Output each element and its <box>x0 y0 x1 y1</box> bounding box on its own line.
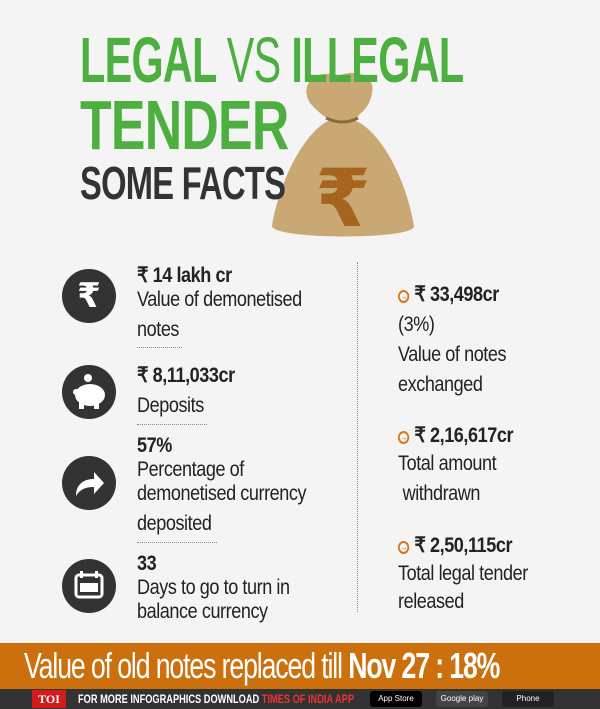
icon: calendar <box>62 559 116 613</box>
text: 57% <box>137 434 306 535</box>
title line 3: SOME FACTS <box>80 157 285 209</box>
icon: arrow <box>62 456 116 510</box>
text: released <box>398 534 528 613</box>
text: exchanged: (3%) <box>398 313 434 336</box>
text: 33 days: balance currency <box>137 600 268 623</box>
banner: Value of old notes replaced till Nov 27 : 18% <box>24 645 499 686</box>
text: exchanged <box>398 283 506 396</box>
text: withdrawn: withdrawn <box>403 482 480 505</box>
footer: TOI <box>38 692 60 706</box>
text: 14 lakh cr <box>137 264 302 341</box>
text: released: ₹ 2,50,115cr <box>414 534 512 557</box>
text: 57%: Percentage of <box>137 458 244 481</box>
icon: piggy bank <box>62 365 116 419</box>
footer <box>0 689 600 709</box>
text: withdrawn <box>398 424 514 505</box>
icon: money bag: ₹ <box>315 154 371 243</box>
footer: App Store <box>378 694 414 703</box>
text: withdrawn: ₹ 2,16,617cr <box>414 424 513 447</box>
footer: FOR MORE INFOGRAPHICS DOWNLOAD TIMES OF INDIA APP <box>78 692 354 706</box>
icon: money bag <box>272 72 414 243</box>
text: 14 lakh cr: ₹ 14 lakh cr <box>137 264 232 287</box>
text: exchanged: → <box>400 291 407 301</box>
text: exchanged: ₹ 33,498cr <box>414 283 499 306</box>
title <box>80 24 463 209</box>
title line 1: LEGAL VS ILLEGAL <box>80 24 463 96</box>
text: 33 days: 33 <box>137 552 156 575</box>
text: 57%: deposited <box>137 512 211 535</box>
text: released: Total legal tender <box>398 562 528 585</box>
text: exchanged: exchanged <box>398 373 483 396</box>
text: released: → <box>400 542 407 552</box>
text: released: released <box>398 590 464 613</box>
text: 33 days: Days to go to turn in <box>137 576 290 599</box>
title line 2: TENDER <box>80 86 289 164</box>
text: 57%: 57% <box>137 434 172 457</box>
footer: Phone <box>516 694 540 703</box>
footer: Google play <box>441 694 483 703</box>
icon: rupee circle: ₹ <box>77 276 101 316</box>
text: withdrawn: → <box>400 432 407 442</box>
text: 57%: demonetised currency <box>137 482 306 505</box>
text: exchanged: Value of notes <box>398 343 506 366</box>
text: deposits <box>137 364 235 417</box>
text: withdrawn: Total amount <box>398 452 496 475</box>
text: 14 lakh cr: Value of demonetised <box>137 288 302 311</box>
text: 33 days <box>137 552 290 623</box>
text: deposits: Deposits <box>137 394 204 417</box>
icon: rupee circle <box>62 269 116 323</box>
text: 14 lakh cr: notes <box>137 318 179 341</box>
text: deposits: ₹ 8,11,033cr <box>137 364 235 387</box>
